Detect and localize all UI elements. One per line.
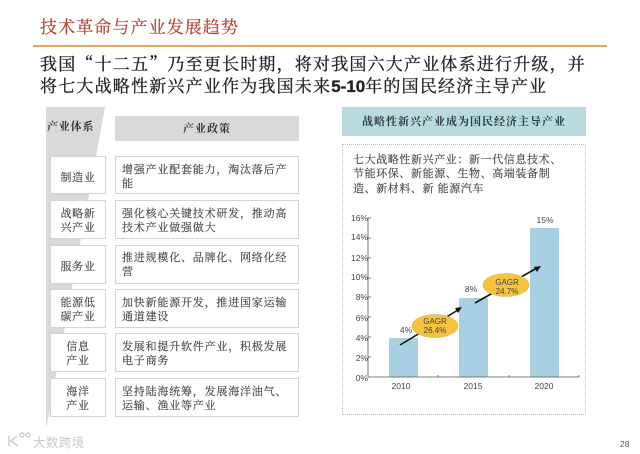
- row 1 policy text: [122, 161, 287, 191]
- title: 技术革命与产业发展趋势: [40, 13, 239, 38]
- x axis labels: 2010: [392, 381, 411, 391]
- row 2 label box: [50, 200, 106, 239]
- bar value labels: 15%: [536, 215, 554, 225]
- row 2 label: [60, 205, 96, 235]
- row 4 label: 能源低: [60, 294, 96, 310]
- heading: industry system: 产业体系: [47, 118, 94, 134]
- panel heading: strategic industries: 战略性新兴产业成为国民经济主导产业: [362, 113, 566, 129]
- row 4 label: [60, 294, 96, 324]
- heading: industry policy: [115, 116, 299, 141]
- growth callout 24.7%: 24.7%: [496, 287, 518, 296]
- bar value labels: 8%: [465, 284, 478, 294]
- y axis labels: 2%: [356, 353, 368, 363]
- row 6 policy box: [115, 378, 299, 417]
- growth callout 26.4%: 26.4%: [424, 326, 446, 335]
- row 4 policy text: 加快新能源开发，推进国家运输: [122, 294, 287, 310]
- y axis labels: 0%: [356, 373, 368, 383]
- row 6 policy text: 坚持陆海统筹，发展海洋油气、: [122, 383, 287, 399]
- row 2 policy text: 强化核心关键技术研发，推动高: [122, 205, 287, 221]
- axes: [368, 218, 579, 377]
- row 3 policy text: 推进规模化、品牌化、网络化经: [122, 249, 287, 265]
- row 2 policy box: [115, 200, 299, 239]
- page number: 28: [620, 439, 629, 449]
- heading: industry policy: 产业政策: [183, 120, 231, 136]
- row 1 policy text: 能: [122, 175, 134, 191]
- y axis labels: 10%: [351, 272, 368, 282]
- row 5 policy text: [122, 338, 287, 368]
- row 3 policy box: [115, 245, 299, 284]
- description text: [353, 151, 562, 196]
- row 4 label box: [50, 289, 106, 328]
- y axis labels: 14%: [351, 232, 368, 242]
- description text: 七大战略性新兴产业：新一代信息技术、: [353, 151, 562, 167]
- row 6 policy text: 运输、渔业等产业: [122, 397, 216, 413]
- headline text: [40, 50, 586, 96]
- description text: 节能环保、新能源、生物、高端装备制: [353, 165, 550, 181]
- row 5 policy box: [115, 333, 299, 372]
- y axis labels: 6%: [356, 313, 368, 323]
- growth callout 26.4%: GAGR: [423, 317, 447, 326]
- y axis labels: 16%: [351, 213, 368, 223]
- growth callout 26.4%: [412, 314, 458, 338]
- title rule: [33, 44, 607, 46]
- y axis labels: [351, 213, 368, 383]
- row 4 policy text: [122, 294, 287, 324]
- row 6 policy text: [122, 383, 287, 413]
- growth callout 24.7%: [483, 274, 529, 296]
- x axis labels: 2015: [464, 381, 483, 391]
- description text: 造、新材料、新 能源汽车: [353, 180, 484, 196]
- row 6 label: 海洋: [66, 383, 90, 399]
- row 1 policy text: 增强产业配套能力，淘汰落后产: [122, 161, 287, 177]
- row 3 policy text: [122, 249, 287, 279]
- row 2 policy text: 技术产业做强做大: [122, 219, 216, 235]
- y axis labels: 8%: [356, 292, 368, 302]
- bars: [389, 228, 559, 377]
- row 2 policy text: [122, 205, 287, 235]
- row 4 label: 碳产业: [60, 308, 96, 324]
- panel heading: strategic industries: [342, 107, 586, 136]
- row 2 label: 战略新: [60, 205, 96, 221]
- row 5 policy text: 发展和提升软件产业，积极发展: [122, 338, 287, 354]
- y axis labels: 12%: [351, 253, 368, 263]
- growth callout 24.7%: GAGR: [495, 278, 519, 287]
- row 4 policy box: [115, 289, 299, 328]
- row 1 label box: [50, 156, 106, 194]
- x axis labels: 2020: [535, 381, 554, 391]
- row 2 label: 兴产业: [60, 219, 96, 235]
- panel: chart and description frame: [342, 144, 586, 415]
- bar value labels: [400, 215, 554, 335]
- row 1 policy box: [115, 156, 299, 194]
- row 6 label: [66, 383, 90, 413]
- headline text: 我国“十二五”乃至更长时期，将对我国六大产业体系进行升级，并: [40, 50, 586, 74]
- row 6 label box: [50, 378, 106, 417]
- row 4 policy text: 通道建设: [122, 308, 169, 324]
- row 6 label: 产业: [66, 397, 90, 413]
- watermark text: 大数跨境: [33, 436, 85, 450]
- row 3 label box: [50, 245, 106, 284]
- row 5 label box: [50, 333, 106, 372]
- row 3 label: 服务业: [60, 258, 96, 274]
- headline text: 将七大战略性新兴产业作为我国未来5-10年的国民经济主导产业: [40, 72, 547, 96]
- row 5 policy text: 电子商务: [122, 352, 169, 368]
- row 5 label: [66, 338, 90, 368]
- x axis labels: [392, 381, 554, 391]
- bar value labels: 4%: [400, 325, 413, 335]
- row 5 label: 产业: [66, 352, 90, 368]
- growth arrow 2010-2015: [400, 307, 462, 345]
- row 1 label: 制造业: [60, 169, 96, 185]
- growth arrow 2015-2020: [475, 266, 541, 303]
- row 5 label: 信息: [66, 338, 90, 354]
- y axis labels: 4%: [356, 333, 368, 343]
- row 3 policy text: 营: [122, 263, 134, 279]
